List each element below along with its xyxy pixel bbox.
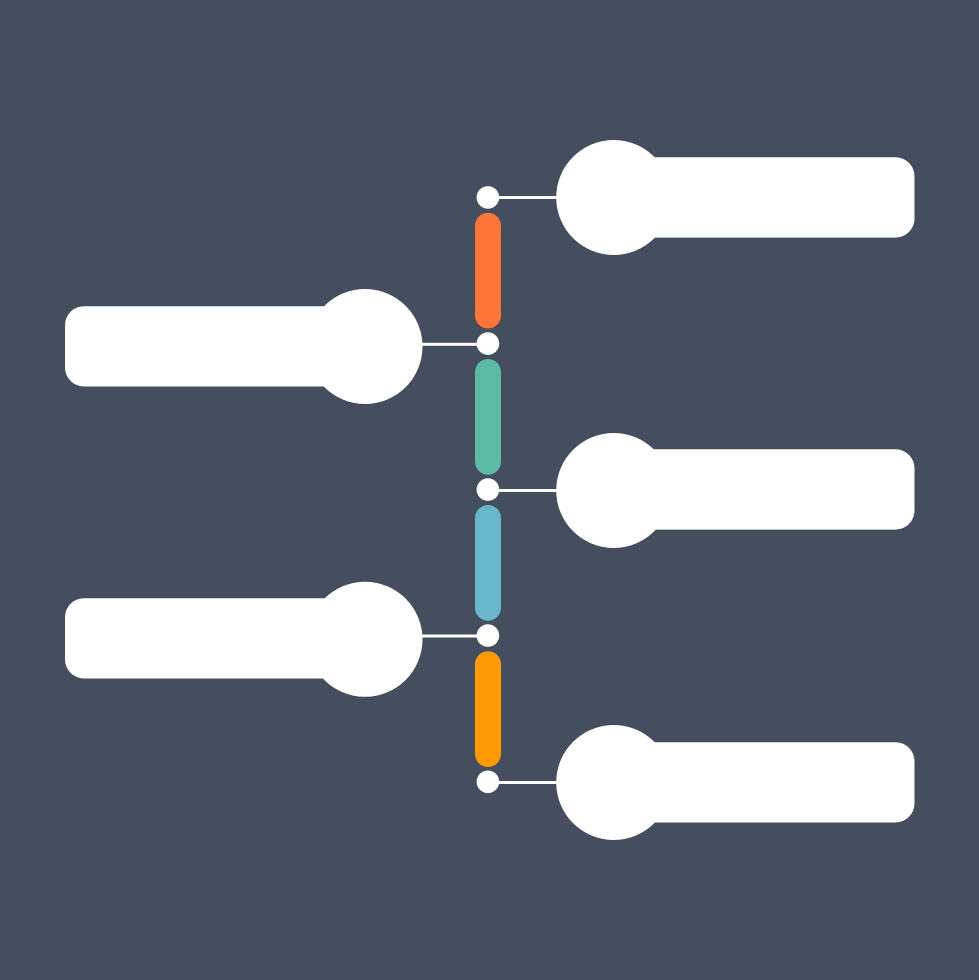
segment: blue xyxy=(475,505,501,621)
step 3: right label xyxy=(477,433,914,548)
segment: orange xyxy=(475,213,501,328)
step 2: left label xyxy=(65,289,499,404)
segment: amber xyxy=(475,651,501,767)
step 1: right label xyxy=(477,140,914,255)
segment: green xyxy=(475,359,501,475)
step 4: left label xyxy=(65,582,499,697)
step 5: right label xyxy=(477,725,914,840)
